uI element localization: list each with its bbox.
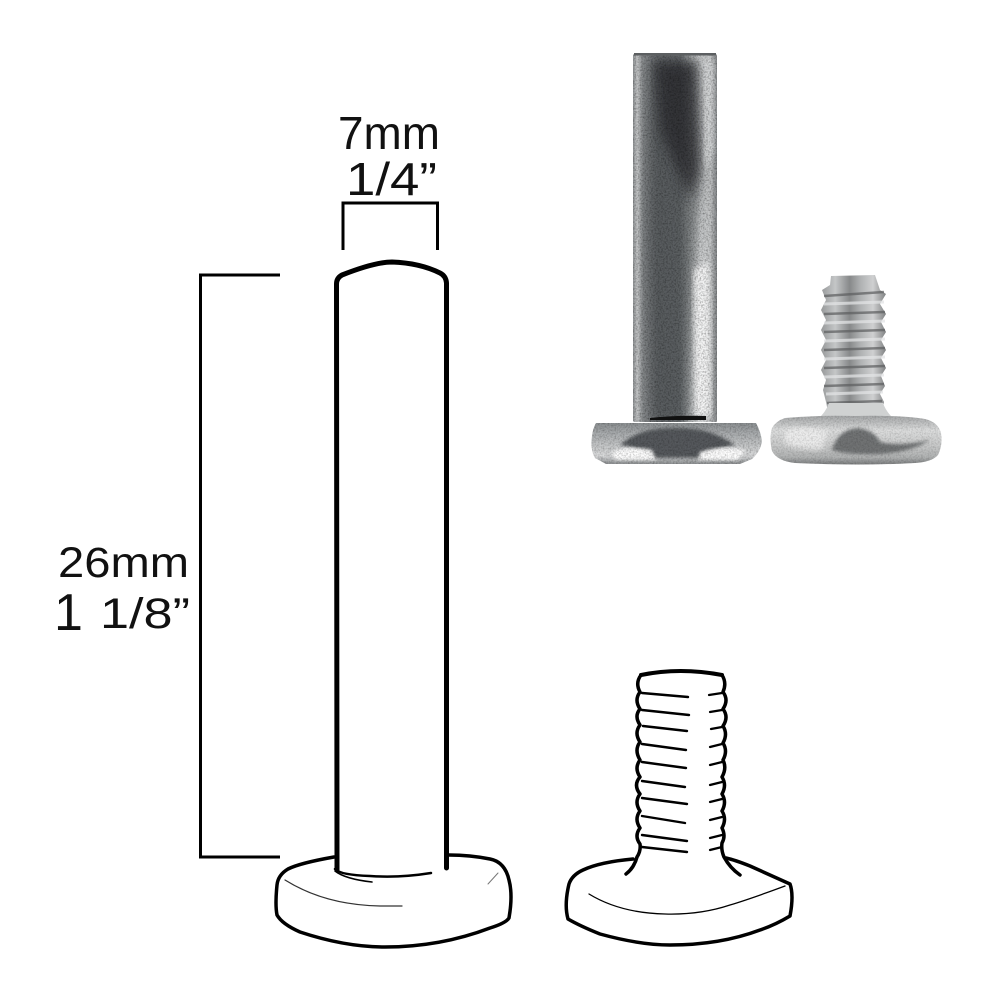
screw head photo: [770, 416, 942, 464]
neck photo: [817, 403, 895, 428]
barrel head photo: [591, 423, 762, 464]
screw head inner curve: [589, 886, 785, 914]
barrel head detail: [590, 422, 764, 466]
label: length 1 1/8 inch: [54, 584, 190, 642]
thread ridges: [824, 292, 885, 403]
diameter bracket: [343, 203, 438, 250]
barrel shaft photo: [633, 54, 717, 422]
barrel shaft outline: [336, 262, 446, 870]
label: length 26mm: 26mm: [58, 539, 189, 587]
photo: long barrel screw: [590, 53, 764, 466]
label: diameter 7mm: 7mm: [338, 107, 440, 159]
thread lines left: [642, 693, 689, 852]
barrel dark patch and highlights: [633, 54, 717, 422]
line drawing: short screw: [566, 671, 792, 945]
barrel dark shadow: [650, 416, 706, 420]
thread left edge: [626, 675, 641, 874]
label: length 1 1/8 inch: 1: [54, 584, 83, 642]
label: diameter 1/4 inch: 1/4”: [346, 153, 437, 205]
screw head outline: [566, 858, 792, 945]
length bracket: [200, 275, 280, 857]
barrel top rim: [634, 53, 716, 56]
thread right edge: [722, 675, 740, 875]
barrel head outline: [276, 855, 511, 947]
label: length 1 1/8 inch: 1/8”: [100, 590, 190, 638]
thread lines right: [709, 693, 722, 850]
infographic canvas: [58, 53, 942, 949]
line drawing: long barrel screw: [276, 262, 511, 947]
thread top: [641, 671, 722, 675]
barrel base curves: [335, 869, 431, 877]
thread photo: [821, 275, 886, 412]
photo: short screw: [770, 275, 944, 466]
screw head detail: [770, 414, 944, 466]
